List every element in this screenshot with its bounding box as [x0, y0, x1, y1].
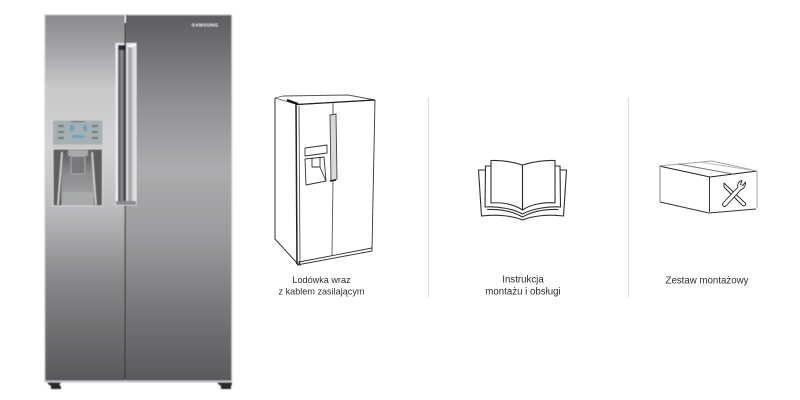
label: manual: Instrukcja	[502, 274, 544, 286]
label: fridge: z kablem zasilającym	[279, 286, 364, 296]
label: fridge	[279, 275, 364, 296]
icon: open book	[478, 160, 566, 220]
icon: line-art refrigerator	[275, 95, 375, 265]
label: mounting kit: Zestaw montażowy	[666, 276, 749, 286]
door edge highlights	[45, 15, 232, 381]
icon: crossed wrench and screwdriver	[723, 180, 746, 206]
label: fridge: Lodówka wraz	[292, 275, 351, 285]
door seam	[124, 23, 126, 380]
bottom trim	[45, 380, 232, 382]
left door	[44, 14, 124, 382]
icon: box with tools	[659, 161, 757, 213]
dispenser	[52, 120, 103, 206]
label: manual: montażu i obsługi	[485, 286, 561, 298]
samsung logo: SAMSUNG	[192, 22, 218, 28]
photo: stainless side-by-side refrigerator	[44, 14, 232, 389]
right door	[126, 14, 232, 382]
fridge feet	[47, 381, 232, 389]
divider lines	[428, 98, 628, 298]
label: manual	[485, 274, 561, 298]
handle	[116, 43, 136, 206]
